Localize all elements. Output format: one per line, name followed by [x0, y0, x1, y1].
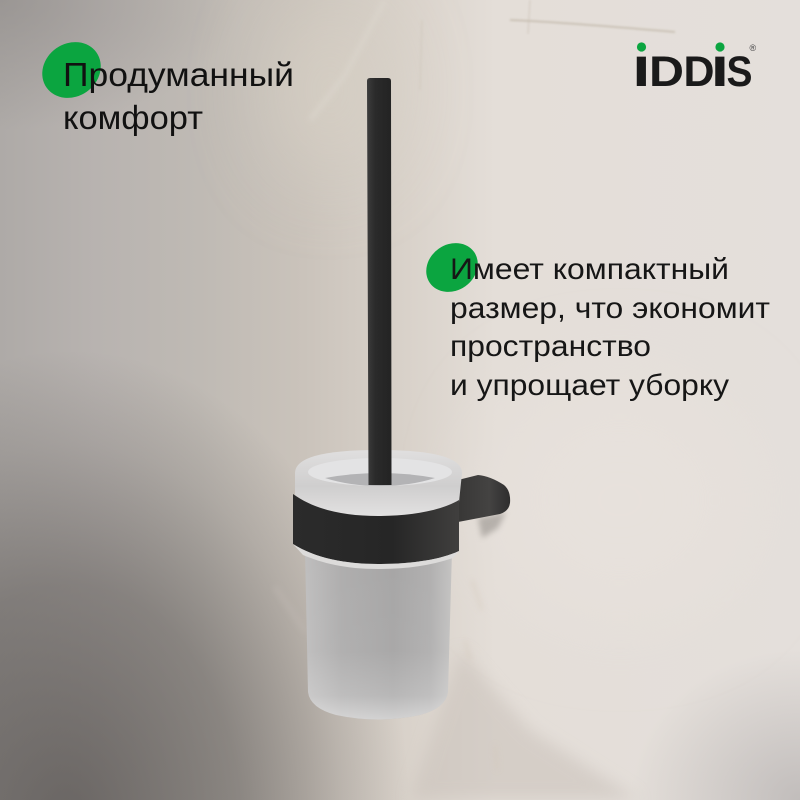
description text [450, 253, 770, 402]
logo: IDDIS: I [711, 49, 729, 96]
heading first line: Продуманный [63, 56, 294, 93]
logo: IDDIS: S [726, 49, 752, 96]
product: toilet brush holder [293, 78, 510, 720]
veins [310, 0, 385, 120]
logo: IDDIS: ® [750, 43, 756, 53]
band lower rim [293, 544, 459, 569]
heading second line: комфорт [63, 99, 203, 136]
description text: размер, что экономит [450, 292, 770, 325]
bracket shadow [478, 512, 506, 538]
text marker: green blob [417, 233, 487, 302]
description text: и упрощает уборку [450, 369, 729, 402]
logo: IDDIS: D [649, 49, 684, 96]
description text: пространство [450, 330, 651, 363]
glass cup [305, 550, 452, 720]
description text: Имеет компактный [450, 253, 729, 286]
logo: IDDIS [632, 42, 756, 96]
wall bracket [458, 475, 510, 522]
black band [293, 494, 459, 564]
brush handle [367, 78, 392, 485]
logo: IDDIS: I [632, 49, 650, 96]
heading marker: green blob [31, 31, 112, 109]
glass rim [295, 450, 462, 516]
logo: IDDIS: D [684, 49, 714, 96]
